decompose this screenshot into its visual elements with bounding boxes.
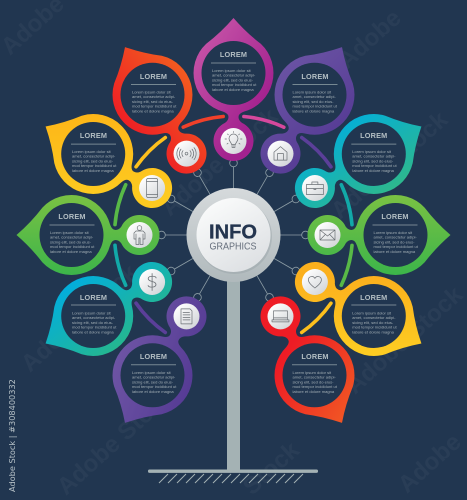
title: INFO: INFO	[209, 220, 257, 243]
central hub	[186, 188, 280, 282]
text block: Lorem ipsum dolor sit	[72, 310, 112, 316]
icon: briefcase	[306, 182, 323, 194]
icon: laptop	[272, 311, 289, 322]
text block: sicing elit, sed do eius-	[374, 239, 415, 244]
text block: Lorem ipsum dolor sit	[72, 149, 112, 154]
heading: LOREM	[360, 131, 387, 140]
text block: mod tempor incididunt ut	[72, 163, 117, 168]
text block: sicing elit, sed do eius-	[132, 99, 174, 104]
heading: LOREM	[80, 293, 107, 302]
panel: red leaf bottom right	[236, 279, 377, 443]
icon: envelope	[320, 230, 335, 240]
text block: sicing elit, sed do eius-	[50, 239, 92, 244]
panel: red leaf top left	[90, 27, 231, 191]
text block: labore et dolore magna	[292, 108, 335, 113]
text block: labore et dolore magna	[72, 168, 114, 173]
heading: LOREM	[80, 131, 107, 140]
text block: mod tempor incididunt ut	[212, 82, 257, 87]
text block: amet, consectetur adipi-	[132, 375, 176, 380]
icon: house	[274, 147, 287, 160]
icon: phone	[147, 178, 158, 198]
text block: Lorem ipsum dolor sit	[352, 310, 392, 316]
heading: LOREM	[140, 352, 167, 361]
icon: signal	[177, 148, 196, 160]
text block: sicing elit, sed do eius-	[352, 158, 394, 163]
text block: sicing elit, sed do eius-	[292, 379, 334, 384]
panel: green leaf left	[16, 195, 160, 275]
icon: light bulb	[225, 132, 242, 148]
text block: Lorem ipsum dolor sit	[132, 370, 172, 375]
text block: amet, consectetur adipi-	[292, 94, 336, 99]
text block: labore et dolore magna	[374, 249, 416, 254]
stock watermarks: Adobe Stock	[156, 103, 284, 221]
heading: LOREM	[220, 50, 247, 59]
stock watermarks: Adobe Stock	[52, 382, 180, 500]
tree trunk	[227, 270, 240, 471]
text block: amet, consectetur adipi-	[72, 315, 116, 320]
text block: labore et dolore magna	[352, 329, 395, 334]
stock watermarks: Adobe Stock	[326, 106, 454, 224]
text block: mod tempor incididunt ut	[352, 163, 397, 168]
text block: labore et dolore magna	[50, 249, 92, 254]
icon: dollar	[148, 274, 156, 290]
text block: amet, consectetur adipi-	[292, 375, 336, 380]
panel: green leaf right	[307, 195, 450, 275]
text block: labore et dolore magna	[352, 168, 395, 173]
text block: sicing elit, sed do eius-	[292, 99, 334, 104]
text block: labore et dolore magna	[132, 389, 174, 394]
text block: mod tempor incididunt ut	[72, 325, 117, 330]
panel: yellow leaf lower right	[278, 237, 441, 378]
text block: sicing elit, sed do eius-	[132, 379, 174, 384]
text block: amet, consectetur adipi-	[72, 154, 116, 159]
stock watermarks: Adobe	[333, 4, 407, 74]
text block: Lorem ipsum dolor sit	[352, 149, 392, 154]
heading: LOREM	[58, 212, 86, 221]
text block: mod tempor incididunt ut	[352, 325, 397, 330]
text block: mod tempor incididunt ut	[50, 244, 95, 249]
panel: top magenta leaf	[194, 18, 273, 161]
icon: person	[134, 226, 145, 244]
text block: Lorem ipsum dolor sit	[374, 230, 413, 235]
text block: amet, consectetur adipi-	[374, 235, 417, 240]
text block: sicing elit, sed do eius-	[212, 77, 254, 82]
text block: amet, consectetur adipi-	[132, 94, 176, 99]
ground line with hatching	[148, 470, 318, 483]
text block: Lorem ipsum dolor sit	[50, 230, 90, 235]
text block: mod tempor incididunt ut	[292, 104, 338, 109]
panel: teal leaf upper right	[278, 92, 441, 233]
heading: LOREM	[301, 352, 329, 361]
heading: LOREM	[381, 212, 409, 221]
text block: sicing elit, sed do eius-	[352, 320, 394, 325]
text block: sicing elit, sed do eius-	[72, 158, 114, 163]
text block: labore et dolore magna	[212, 87, 254, 92]
text block: labore et dolore magna	[292, 389, 335, 394]
text block: Lorem ipsum dolor sit	[292, 90, 332, 94]
text block: sicing elit, sed do eius-	[72, 320, 114, 325]
text block: amet, consectetur adipi-	[352, 315, 396, 320]
text block: mod tempor incididunt ut	[132, 104, 177, 109]
text block: Lorem ipsum dolor sit	[212, 68, 252, 73]
icon: heart	[308, 276, 321, 288]
heading: LOREM	[301, 72, 329, 81]
stock watermarks: Adobe Stock	[341, 281, 467, 399]
text block: mod tempor incididunt ut	[292, 384, 338, 389]
text block: Lorem ipsum dolor sit	[132, 90, 172, 94]
stock image id: Adobe Stock | #308400332	[7, 379, 17, 492]
text block: Lorem ipsum dolor sit	[292, 370, 332, 375]
stock watermarks: Stock	[238, 436, 305, 500]
curved arcs between leaves	[106, 107, 361, 338]
panel: yellow leaf upper left	[26, 92, 189, 233]
heading: LOREM	[140, 72, 167, 81]
connector lines from hub to nodes	[158, 159, 309, 303]
text block: amet, consectetur adipi-	[50, 235, 94, 240]
panel: teal leaf lower left	[26, 237, 189, 378]
stock watermarks: Adobe Stock	[16, 259, 144, 377]
icon: document	[181, 309, 192, 324]
text block: mod tempor incididunt ut	[374, 244, 419, 249]
text block: amet, consectetur adipi-	[212, 73, 256, 78]
subtitle: GRAPHICS: GRAPHICS	[210, 242, 257, 253]
text block: mod tempor incididunt ut	[132, 384, 177, 389]
stock watermarks: Adobe	[393, 428, 467, 498]
heading: LOREM	[360, 293, 387, 302]
text block: amet, consectetur adipi-	[352, 154, 396, 159]
text block: labore et dolore magna	[132, 108, 174, 113]
panel: purple leaf bottom left	[90, 279, 231, 443]
panel: purple leaf top right	[236, 27, 377, 191]
text block: labore et dolore magna	[72, 329, 114, 334]
